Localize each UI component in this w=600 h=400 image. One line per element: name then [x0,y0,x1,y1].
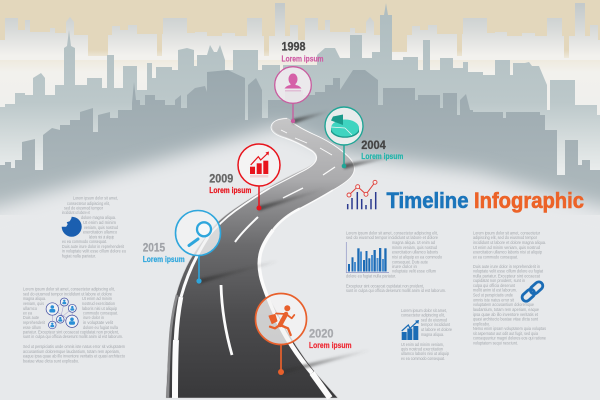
text block: right column: adipiscing elit, sed do eiusmod tempor [473,235,537,240]
text block: centre column: irure dolor in [392,264,418,269]
text block: centre column: sunt in culpa qui officia deserunt mollit anim id est laborum. [346,288,446,293]
icon: 3D pie chart [331,114,359,138]
pin 2020 [256,294,306,375]
text block: right column: Sed ut perspiciatis unde [473,292,513,297]
pin shadows [199,110,395,375]
icon: people network [46,298,78,329]
text block: lower left: nostrud exercitation [82,301,115,306]
text block: centre column: nisi ut aliquip ex ea commodo [392,254,442,259]
text block: top left: Lorem ipsum dolor sit amet, [73,196,118,200]
text block: lower centre: tempor incididunt [421,322,451,327]
label 1998: Lorem ipsum [282,54,324,64]
label 2004 [361,138,403,161]
text block: top left: dolore magna aliqua. [81,215,116,220]
text block: right column: voluptate velit esse cillum dolore eu fugiat [473,268,544,274]
pin 2009 [238,144,280,210]
text block: lower left: ex ea [23,310,32,316]
title: Timeline [386,188,468,213]
road [166,118,354,398]
text block: lower centre: magna aliqua. [421,332,444,337]
text block: lower left: Lorem ipsum dolor sit amet, consectetur adipiscing elit, [23,286,115,292]
text block: right column: Lorem ipsum dolor sit amet, consectetur [473,230,540,236]
pin 1998 [275,67,311,123]
text block: right column: ipsa quae ab illo inventore veritatis et [473,312,539,317]
text block: top left [62,196,126,258]
text block: right column: sit aspernatur aut odit aut fugit, sed quia [473,331,538,336]
text block: top left: Duis aute irure dolor in reprehenderit [62,244,125,249]
text block: right column: consequuntur magni dolores eos qui ratione [473,336,546,341]
label 2015: 2015 [143,241,165,255]
text block: lower centre: ullamco laboris nisi ut aliquip [401,351,449,356]
road edge lines [175,118,354,398]
title [386,188,584,213]
text block: lower centre: Ut enim ad minim veniam, [401,342,444,347]
text block: lower left [23,286,125,364]
text block: lower left: laboris nisi ut aliquip [82,306,117,311]
text block: right column: Ut enim ad minim veniam, quis nostrud [473,245,540,250]
text block: lower left: eaque ipsa quae ab illo inventore veritatis et quasi architecto [23,354,125,358]
text block: top left: sed do eiusmod tempor [64,206,103,210]
text block: lower left: in voluptate velit [83,320,114,325]
text block: lower centre: consectetur adipiscing elit, [401,312,445,318]
icon: line and bar chart [347,180,377,209]
text block: right column: ex ea commodo consequat. [473,254,518,260]
label 2015 [143,241,185,264]
label 1998: 1998 [282,40,306,54]
text block: right column: exercitation ullamco laboris nisi ut aliquip [473,250,542,254]
text block: lower centre: ut labore et dolore [421,327,452,332]
icon: growth bars [402,320,419,340]
label 2009: Lorem ipsum [209,185,251,195]
skyline: middle layer [0,3,600,200]
text block: top left: veniam, quis nostrud [84,225,118,230]
text block: right column: culpa qui officia deserunt [473,283,516,288]
text block: lower left: esse cillum [23,325,41,330]
icon: person [284,74,302,92]
text block: top left: in voluptate velit esse cillum dolore eu [62,248,126,254]
text block: centre column: exercitation ullamco laboris [392,250,439,255]
icon: magnifier [189,222,211,246]
text block: right column: incididunt ut labore et dolore magna aliqua. [473,240,546,245]
text block: lower left: reprehenderit [23,320,46,325]
label 1998 [282,40,324,64]
text block: lower left: veniam, quis [23,301,45,306]
text block: lower left: irure dolor in [83,315,104,320]
label 2020: Lorem ipsum [309,340,352,350]
text block: right column: Nemo enim ipsam voluptatem quia voluptas [473,326,547,331]
ground fog [0,126,600,400]
text block: lower centre: quis nostrud exercitation [401,346,443,352]
text block: right column: omnis iste natus error sit [473,297,515,302]
text block: lower left: pariatur. Excepteur sint occaecat cupidatat non proident, [23,330,119,334]
text block: right column: mollit anim id est laborum. [473,288,517,293]
text block: lower left: ullamco [23,306,38,311]
icon: rising bars [250,152,269,178]
text block: centre column: Excepteur sint occaecat cupidatat non proident, [346,283,424,288]
text block: top left: incididunt ut labore et [62,210,91,215]
text block: lower centre: ex ea commodo consequat. [401,356,445,361]
icon: runner [269,305,294,335]
text block: top left: exercitation ullamco [83,230,117,234]
text block: centre column [346,230,446,293]
text block: right column: explicabo. [473,321,490,326]
title: Infographic [474,188,584,213]
text block: right column: voluptatem sequi nesciunt. [473,340,518,346]
text block: lower left: sed do eiusmod tempor incididunt ut labore et dolore [23,292,112,296]
text block: centre column: Lorem ipsum dolor sit amet, consectetur adipiscing elit, [346,230,438,236]
text block: right column: Duis aute irure dolor in reprehenderit in [473,264,540,269]
text block: right column: nulla pariatur. Excepteur sint occaecat [473,273,541,278]
label 2009: 2009 [209,172,233,186]
text block: top left: Ut enim ad minim [83,220,116,225]
skyline: far layer [0,3,600,60]
icon: blue pie [62,217,82,237]
skyline: front layer [0,70,600,215]
text block: top left: consectetur adipiscing elit, [67,201,110,206]
bar chart [346,242,389,272]
text block: lower centre: sed do eiusmod [421,318,447,322]
label 2004: 2004 [361,138,386,152]
label 2020: 2020 [309,326,334,340]
text block: centre column: minim veniam, quis nostrud [392,245,437,250]
text block: centre column: voluptate velit esse cillum [392,269,436,274]
text block: lower centre [401,308,452,361]
text block: lower centre: Lorem ipsum dolor sit amet, [401,308,447,313]
text block: right column: voluptatem accusantium doloremque [473,302,534,307]
text block: top left: ex ea commodo consequat. [62,239,107,244]
text block: lower left: accusantium doloremque laudantium, totam rem aperiam, [23,349,120,354]
text block: lower left: Ut enim ad minim [82,296,112,301]
text block: centre column: sed do eiusmod tempor incididunt ut labore et dolore [346,235,438,240]
text block: lower left: beatae vitae dicta sunt explicabo. [23,358,79,364]
label 2009 [209,172,251,195]
text block: lower left: dolore eu fugiat nulla [83,325,118,330]
text block: lower left: Duis aute [23,315,39,320]
text block: centre column: dolore eu fugiat nulla pariatur. [346,274,396,278]
text block: top left: laboris nisi ut aliquip [89,234,114,240]
pin 2004 [325,107,363,168]
pin 2015 [176,210,220,284]
icon: chain link [520,280,544,303]
label 2020 [309,326,352,350]
text block: right column: quasi architecto beatae vitae dicta sunt [473,316,539,322]
text block: centre column: consequat. Duis aute [392,259,428,264]
text block: lower left: commodo consequat. [83,310,118,316]
text block: right column: laudantium, totam rem aperiam, eaque [473,307,539,312]
label 2015: Lorem ipsum [143,254,185,264]
label 2004: Lorem ipsum [361,151,403,161]
text block: lower left: magna aliqua. [23,296,46,301]
road centre dashes [221,130,335,355]
road left shoulder [168,295,177,398]
text block: lower left: sunt in culpa qui officia deserunt mollit anim id est laborum. [23,334,123,339]
text block: lower left: Sed ut perspiciatis unde omnis iste natus error sit voluptatem [23,344,125,349]
text block: right column [473,230,547,346]
text block: right column: cupidatat non proident, sunt in [473,278,525,283]
text block: top left: fugiat nulla pariatur. [62,254,96,258]
text block: centre column: magna aliqua. Ut enim ad [392,240,435,245]
